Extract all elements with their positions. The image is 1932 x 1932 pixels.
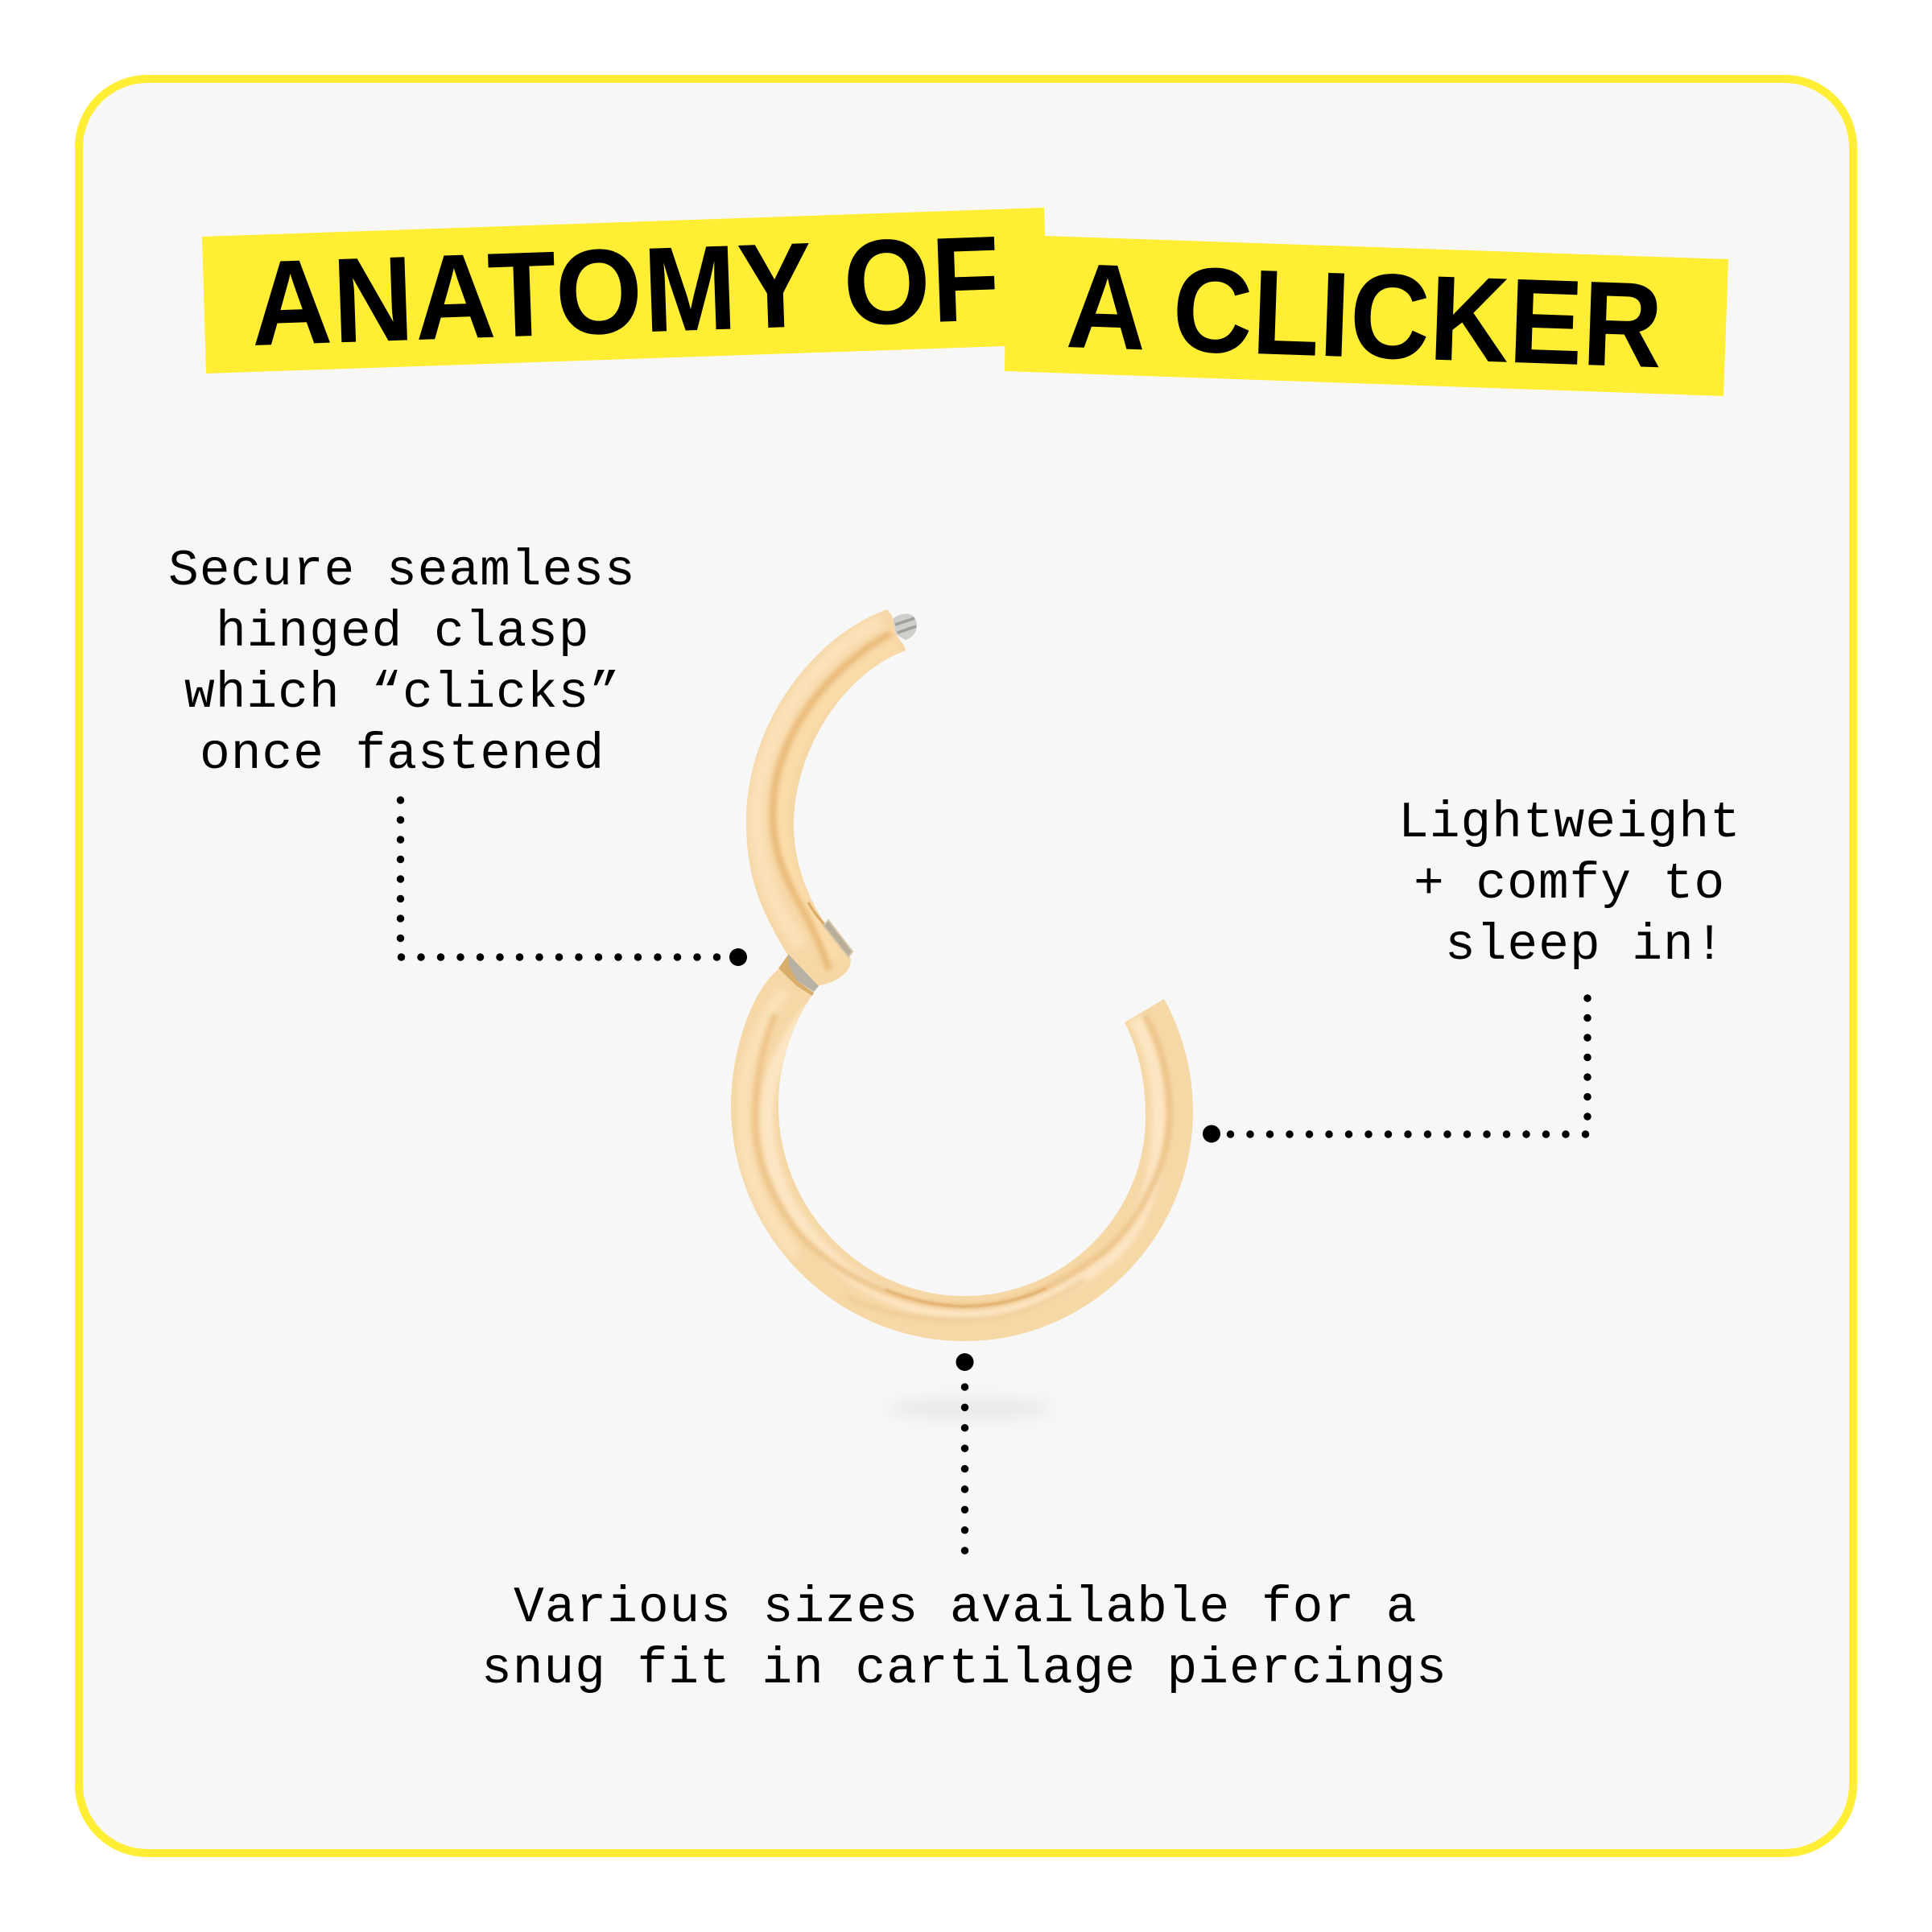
callout text: sizes: Various sizes available for a [514,1579,1417,1637]
dotted leader: sizes [956,1353,974,1554]
callout text: lightweight [1398,795,1741,974]
callout text: lightweight: + comfy to [1414,856,1725,913]
hinge latch plate [824,920,852,957]
lower ring segment [731,969,1193,1341]
title banner: ANATOMY OF: ANATOMY OF [249,210,1002,371]
callout text: hinged clasp [168,543,636,783]
hinge pin [788,954,819,992]
callout text: hinged clasp: once fastened [200,726,605,783]
callout text: lightweight: Lightweight [1398,795,1741,852]
title banner: A CLICKER: A CLICKER [1064,238,1665,394]
callout text: hinged clasp: hinged clasp [216,604,589,661]
callout text: sizes [481,1579,1447,1698]
illustration: gold clicker ring [731,609,1193,1341]
callout text: hinged clasp: which “clicks” [184,665,621,722]
hinge collar [778,955,814,996]
soft shadow under ring [886,1397,1054,1420]
callout text: lightweight: sleep in! [1445,917,1725,974]
clasp pin tip [893,614,917,640]
upper ring segment [746,609,906,986]
dotted leader: hinged clasp [401,800,747,966]
dotted leader: lightweight [1203,998,1587,1143]
callout text: sizes: snug fit in cartilage piercings [481,1641,1447,1698]
callout text: hinged clasp: Secure seamless [168,543,636,600]
